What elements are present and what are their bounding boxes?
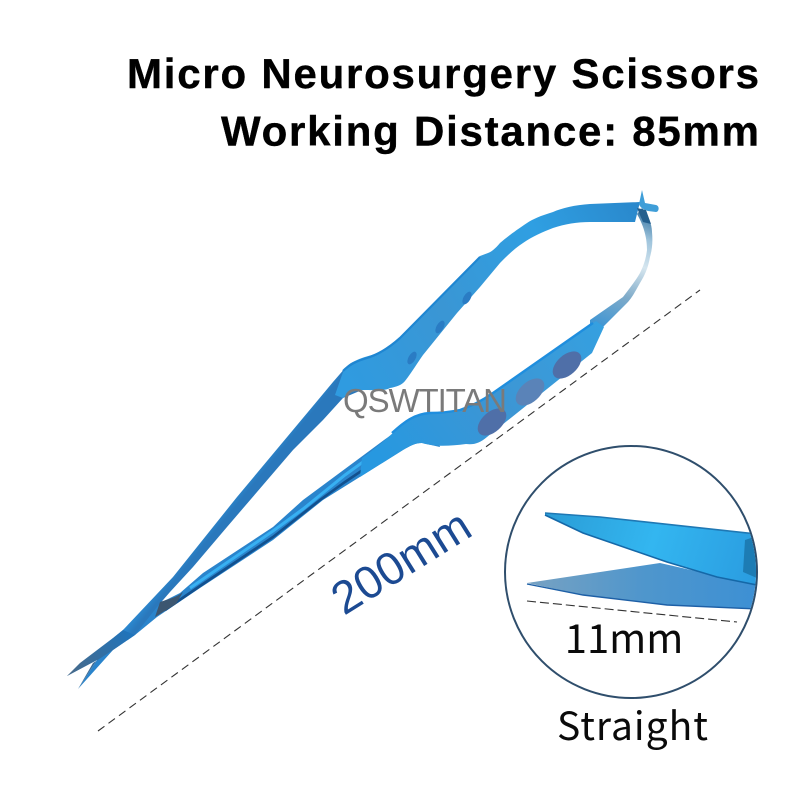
spring blade xyxy=(590,208,652,343)
lower arm dark line xyxy=(165,445,400,610)
hinge shadow xyxy=(637,208,651,224)
blades xyxy=(527,513,757,609)
hinge pin xyxy=(639,190,659,212)
upper handle holes xyxy=(405,290,474,366)
title: Working Distance: 85mm xyxy=(221,108,759,154)
lower handle holes xyxy=(473,346,586,441)
infographic canvas xyxy=(67,57,758,750)
label: 11mm: 11mm xyxy=(565,607,683,665)
title: Micro Neurosurgery Scissors xyxy=(127,50,759,97)
blade tips xyxy=(67,630,135,689)
upper arm xyxy=(123,360,380,635)
lower arm xyxy=(67,413,440,689)
upper blade xyxy=(545,513,757,585)
length label: 200mm: 200mm xyxy=(322,499,480,624)
lower handle highlight xyxy=(392,323,593,433)
dashed measure line: 200mm xyxy=(98,290,700,731)
detail inset: blade close-up xyxy=(505,446,757,698)
caption: Straight: Straight xyxy=(557,696,708,752)
scissors illustration xyxy=(67,190,659,689)
inset circle xyxy=(505,446,757,698)
pivot shadow xyxy=(155,592,183,617)
lower handle xyxy=(360,321,604,477)
dashed measure line: 11mm xyxy=(527,601,737,622)
upper handle highlight xyxy=(343,257,480,371)
watermark: QSWTITAN xyxy=(343,382,507,419)
upper handle xyxy=(335,202,640,398)
lower arm highlight xyxy=(190,446,385,588)
lower blade xyxy=(527,563,757,609)
title xyxy=(127,50,759,154)
